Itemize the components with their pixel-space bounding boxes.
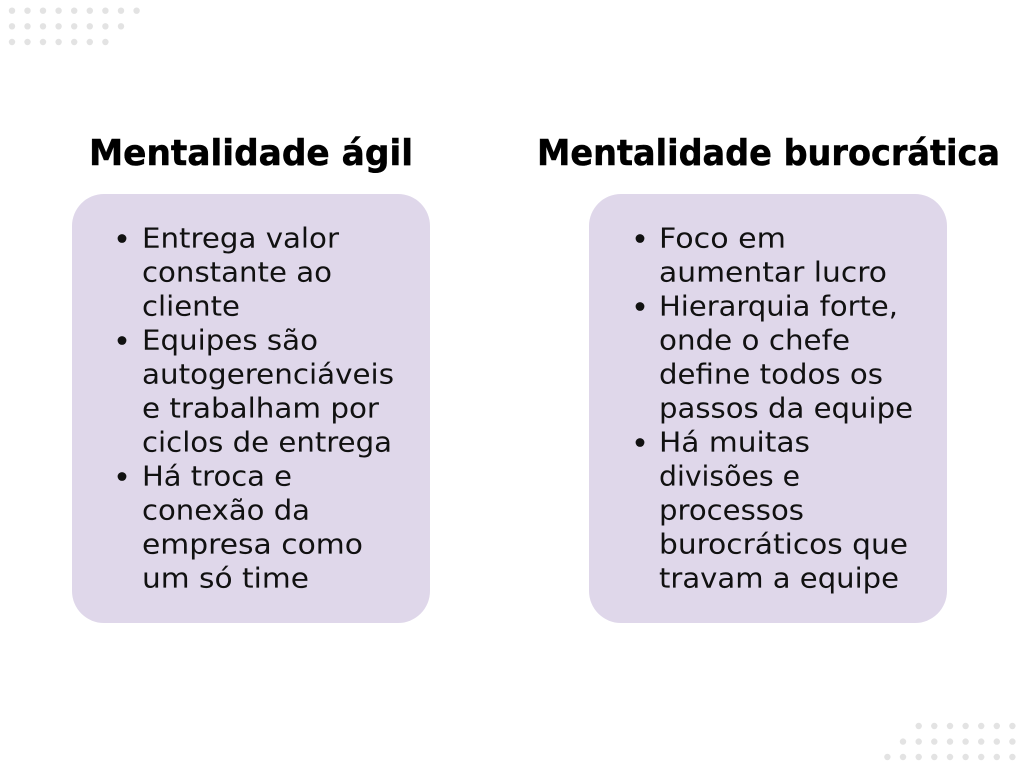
list item: self-managed teams: e trabalham por [142, 392, 380, 424]
panel: bureaucratic mindset [589, 194, 947, 623]
list item: constant value: cliente [142, 290, 240, 322]
list item: one team: conexão da [142, 494, 310, 526]
heading: Mentalidade burocrática: Mentalidade burocrática [537, 133, 1000, 174]
list item: constant value: Entrega valor [142, 222, 340, 254]
bullet list: agile mindset [118, 222, 394, 594]
list item: self-managed teams: ciclos de entrega [142, 426, 392, 458]
list item: strong hierarchy: Hierarquia forte, [659, 290, 898, 322]
list item: profit focus: aumentar lucro [659, 256, 887, 288]
list item: constant value: constante ao [142, 256, 332, 288]
list item: one team: Há troca e [142, 460, 292, 492]
list item: one team: um só time [142, 562, 309, 594]
list item: bureaucratic processes: divisões e [659, 460, 800, 492]
list item: strong hierarchy: define todos os [659, 358, 883, 390]
panel: agile mindset [72, 194, 430, 623]
list item: strong hierarchy: passos da equipe [659, 392, 913, 424]
list item: bureaucratic processes: travam a equipe [659, 562, 899, 594]
list item: bureaucratic processes: Há muitas [659, 426, 810, 458]
decorative dots: top left [9, 8, 140, 45]
list item: self-managed teams [118, 324, 394, 458]
list item: bureaucratic processes: burocráticos que [659, 528, 908, 560]
list item: strong hierarchy: onde o chefe [659, 324, 850, 356]
list item: one team: empresa como [142, 528, 363, 560]
list item: self-managed teams: Equipes são [142, 324, 318, 356]
list item: self-managed teams: autogerenciáveis [142, 358, 394, 390]
list item: bureaucratic processes: processos [659, 494, 804, 526]
list item: one team [118, 460, 363, 594]
list item: strong hierarchy [636, 290, 913, 424]
list item: bureaucratic processes [636, 426, 908, 594]
heading: Mentalidade ágil: Mentalidade ágil [89, 133, 413, 174]
bullet list: bureaucratic mindset [636, 222, 913, 594]
list item: profit focus: Foco em [659, 222, 786, 254]
list item: constant value [118, 222, 339, 322]
decorative dots: bottom right [884, 723, 1016, 760]
list item: profit focus [636, 222, 887, 288]
